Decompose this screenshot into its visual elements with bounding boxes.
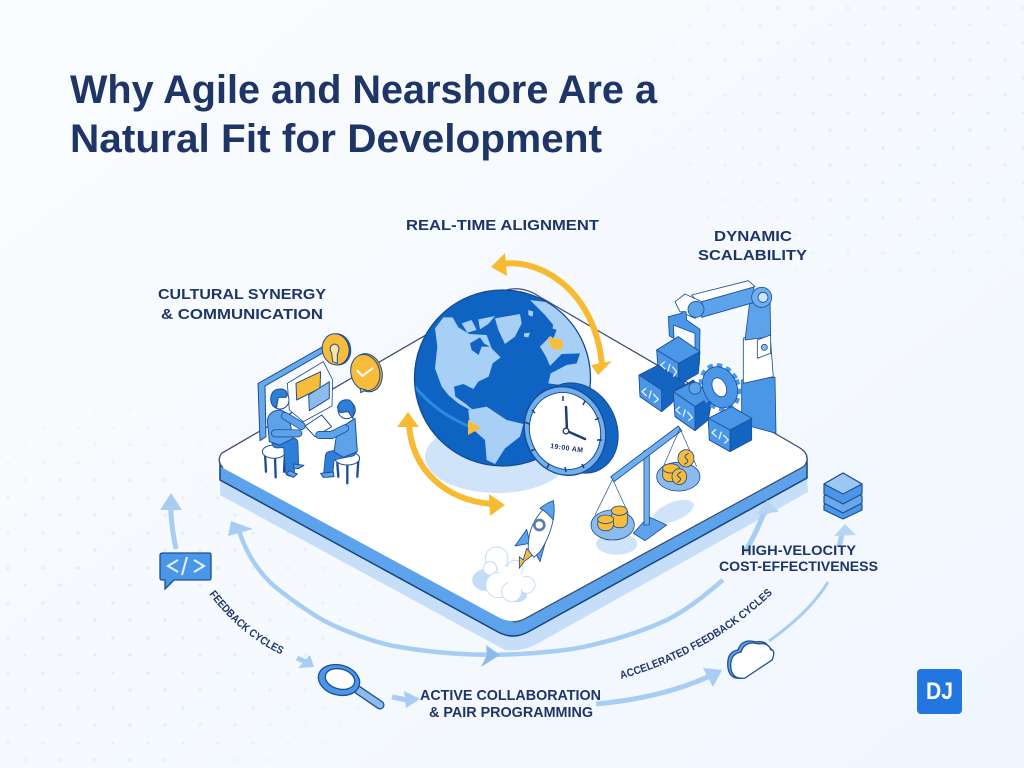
globe location markers bbox=[468, 337, 563, 435]
arrow: cloud to server bbox=[769, 524, 856, 641]
label: real-time alignment: REAL-TIME ALIGNMENT bbox=[406, 217, 599, 234]
label: high-velocity cost-effectiveness: COST-EFFECTIVENESS bbox=[719, 558, 878, 574]
check badge bbox=[347, 350, 386, 395]
label: dynamic scalability: SCALABILITY bbox=[698, 247, 807, 264]
icon: rocket with clouds bbox=[473, 501, 554, 602]
board panel bbox=[258, 347, 323, 441]
right stool bbox=[335, 452, 360, 483]
beam bbox=[611, 426, 682, 482]
code glyphs bbox=[642, 362, 728, 443]
gear bbox=[689, 359, 746, 415]
logo: DJ: DJ bbox=[926, 678, 953, 705]
right pan with coins bbox=[657, 450, 700, 491]
label: cultural synergy: & COMMUNICATION bbox=[161, 306, 323, 323]
label: high-velocity cost-effectiveness: HIGH-VELOCITY bbox=[741, 542, 857, 558]
icon: server stack bbox=[824, 473, 862, 519]
label: active collaboration: & PAIR PROGRAMMING bbox=[429, 704, 593, 721]
label: dynamic scalability: DYNAMIC bbox=[714, 228, 792, 245]
large feedback arc arrow bbox=[228, 500, 779, 667]
arrow: collaboration to cloud bbox=[596, 668, 722, 704]
icon: cloud bbox=[728, 641, 774, 678]
icon: code speech bubble bbox=[160, 553, 211, 589]
content card bbox=[287, 362, 333, 422]
icon: balance scale bbox=[591, 426, 700, 555]
body bbox=[528, 501, 554, 557]
gripper bbox=[668, 312, 700, 365]
yellow rotation arrow upper bbox=[491, 253, 612, 375]
icon: magnifier bbox=[315, 660, 380, 705]
robot base bbox=[742, 377, 776, 433]
clock bbox=[511, 369, 634, 488]
robot arm bbox=[745, 297, 771, 340]
label: dynamic scalability bbox=[698, 228, 807, 264]
arrow: code to up bbox=[160, 493, 182, 549]
yellow rotation arrow lower bbox=[397, 412, 505, 516]
label: active collaboration: ACTIVE COLLABORATION bbox=[420, 687, 601, 704]
arrow: to magnifier bbox=[297, 655, 314, 668]
flame bbox=[519, 548, 533, 568]
left person bbox=[267, 389, 304, 477]
label: high-velocity cost-effectiveness bbox=[719, 542, 878, 574]
bulb badge bbox=[319, 331, 354, 367]
left pan with coins bbox=[591, 506, 634, 540]
left stool bbox=[262, 445, 286, 477]
cube front bbox=[708, 407, 752, 452]
title: Why Agile and Nearshore Are a bbox=[70, 68, 658, 112]
arrow: magnifier to collaboration bbox=[392, 691, 420, 708]
base and post bbox=[633, 517, 667, 541]
fins bbox=[515, 529, 546, 562]
platform bbox=[219, 289, 808, 650]
document bbox=[305, 415, 332, 437]
globe bbox=[414, 290, 600, 466]
title: Natural Fit for Development bbox=[70, 117, 602, 161]
icon: robot arm with code cubes bbox=[639, 281, 776, 452]
cube top bbox=[657, 337, 700, 385]
scale shadows bbox=[596, 495, 697, 555]
title bbox=[70, 68, 658, 161]
label: active collaboration bbox=[420, 687, 601, 721]
globe with clock and arrows bbox=[397, 253, 634, 516]
clock: 19:00 AM bbox=[550, 443, 584, 455]
icon: team at screen bbox=[258, 331, 386, 483]
label: cultural synergy: CULTURAL SYNERGY bbox=[158, 286, 326, 303]
strings bbox=[595, 428, 697, 515]
right person bbox=[319, 400, 357, 477]
yellow tile bbox=[296, 372, 321, 400]
label: accelerated feedback cycles: ACCELERATED FEEDBACK CYCLES bbox=[621, 589, 772, 679]
clouds bbox=[473, 547, 535, 602]
cube left bbox=[639, 365, 685, 412]
blue tile bbox=[309, 382, 329, 411]
label: feedback cycles: FEEDBACK CYCLES bbox=[209, 590, 284, 654]
label: cultural synergy bbox=[158, 286, 326, 323]
logo: DJ bbox=[917, 669, 962, 714]
globe shadow bbox=[425, 421, 569, 493]
cube middle bbox=[673, 380, 712, 431]
